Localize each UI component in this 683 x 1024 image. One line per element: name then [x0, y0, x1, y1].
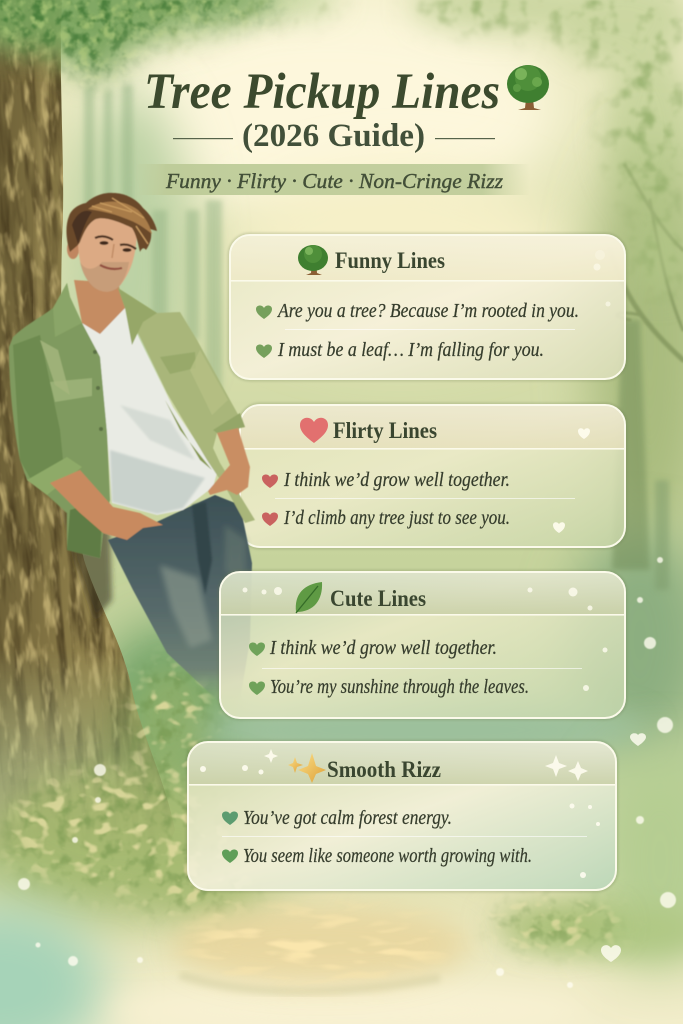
hair [66, 193, 157, 252]
panel: smooth rizz [187, 741, 617, 891]
bokeh dots [242, 587, 608, 691]
subtitle: (2026 Guide) [242, 118, 425, 154]
sunlit forest path [168, 897, 472, 999]
foliage: top right [404, 0, 683, 290]
neck and chest [74, 280, 125, 334]
icon: tree emoji in title [507, 65, 549, 110]
white sparkles [200, 749, 600, 878]
heading: Cute Lines [330, 586, 426, 611]
line 1: You’ve got calm forest energy. [243, 807, 452, 829]
white t-shirt [82, 308, 217, 515]
icon: sparkles [288, 753, 326, 783]
shadow on bark [60, 500, 112, 620]
heading: Smooth Rizz [327, 757, 441, 782]
icon: leaf [296, 582, 322, 613]
bokeh dots [594, 250, 610, 306]
floating hearts [601, 733, 646, 962]
heading: Funny Lines [335, 248, 445, 273]
sparkle hearts [553, 428, 590, 533]
ground foliage and dappled light [2, 656, 619, 964]
ear [67, 239, 79, 259]
face [78, 218, 137, 292]
line 2: I’d climb any tree just to see you. [283, 507, 510, 529]
icon: tree [298, 245, 328, 275]
tagline ribbon [135, 164, 530, 195]
jeans [108, 495, 252, 700]
tagline ribbon: Funny · Flirty · Cute · Non-Cringe Rizz [165, 169, 503, 193]
jacket left panel [9, 283, 110, 558]
panel: flirty lines [239, 404, 626, 548]
right forearm and hand [208, 428, 250, 495]
line 1: I think we’d grow well together. [269, 637, 497, 659]
right side branches [610, 165, 683, 360]
tree trunk [0, 0, 171, 844]
line 2: I must be a leaf… I’m falling for you. [277, 339, 544, 361]
right rolled cuff [213, 413, 245, 433]
subtitle rule right [435, 138, 495, 139]
foliage: top left canopy [0, 0, 350, 95]
floating light specks [18, 557, 676, 988]
left forearm and hand [50, 470, 163, 540]
line 1: I think we’d grow well together. [283, 469, 510, 491]
subtitle rule left [173, 138, 233, 139]
left rolled cuff [27, 457, 82, 495]
heading: Flirty Lines [333, 418, 437, 443]
jacket right panel [118, 288, 255, 523]
panel: funny lines [229, 234, 626, 380]
panel: cute lines [219, 571, 626, 719]
icon: red heart [300, 418, 328, 443]
distant forest trunks [84, 85, 669, 590]
line 2: You seem like someone worth growing with. [243, 845, 532, 867]
young man leaning on tree [9, 193, 255, 700]
line 1: Are you a tree? Because I’m rooted in you. [276, 300, 579, 322]
title: Tree Pickup Lines [144, 64, 500, 120]
line 2: You’re my sunshine through the leaves. [270, 676, 529, 698]
